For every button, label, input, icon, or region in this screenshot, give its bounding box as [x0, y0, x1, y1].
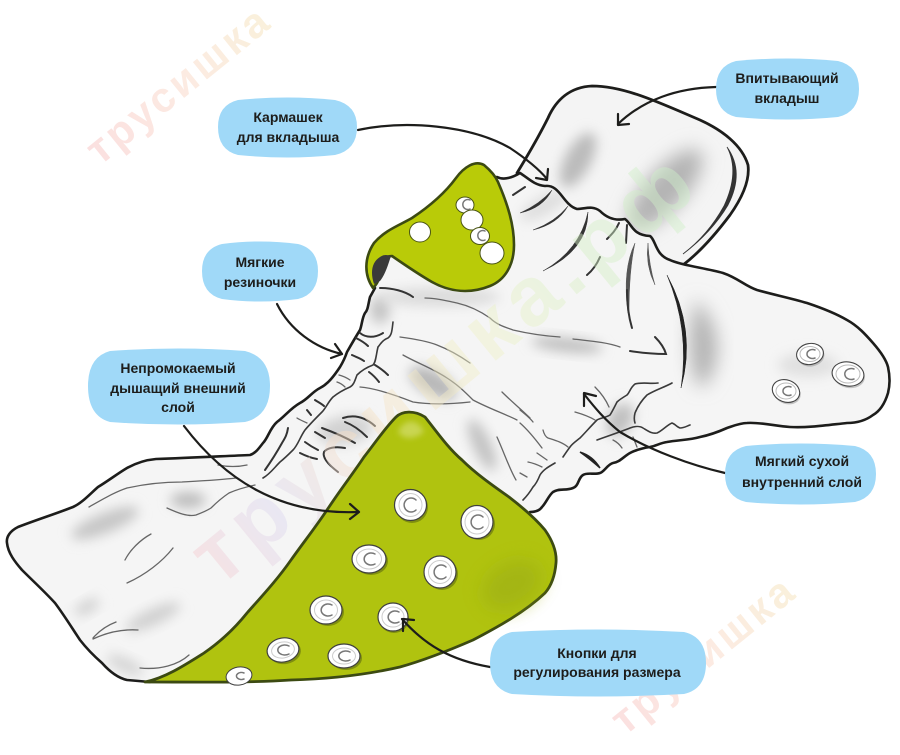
arrow: outer layer	[184, 426, 359, 519]
outline: body edge	[7, 173, 889, 682]
callout: insert: вкладыш	[755, 90, 819, 106]
callout: pocket: для вкладыша	[237, 129, 340, 145]
callout: pocket	[218, 98, 357, 158]
arrow: insert	[618, 87, 716, 125]
wrinkles: waist top	[513, 187, 687, 388]
callout: elastics	[202, 242, 318, 302]
callout: outer layer: слой	[161, 399, 195, 415]
callout: elastics: резиночки	[224, 274, 296, 290]
watermark: top left: трусишка	[76, 0, 280, 173]
wrinkles: lower right gather	[520, 383, 690, 500]
buttons on green layer	[225, 490, 495, 687]
callout: outer layer: дышащий внешний	[110, 380, 246, 396]
callout: snaps	[490, 630, 706, 696]
wrinkles: elastic left	[263, 288, 413, 478]
buttons on tab	[410, 197, 504, 264]
panel: diaper body inner layer	[7, 173, 889, 682]
arrow: snaps	[402, 619, 490, 667]
panel: green top tab	[366, 163, 514, 291]
callout: inner layer: Мягкий сухой	[755, 453, 849, 469]
callout: pocket: Кармашек	[253, 109, 324, 125]
panel: green outer layer	[145, 412, 556, 687]
callout: insert: Впитывающий	[735, 70, 839, 86]
arrow: elastics	[277, 304, 342, 358]
callout: snaps: регулирования размера	[513, 664, 681, 680]
callout: snaps: Кнопки для	[557, 645, 637, 661]
arrow: pocket	[358, 125, 548, 180]
callout: inner layer	[725, 444, 876, 504]
callout: outer layer	[88, 348, 270, 424]
watermark: bottom right: трусишка	[601, 565, 805, 743]
callout: insert	[716, 58, 859, 120]
callout: inner layer: внутренний слой	[742, 474, 862, 490]
callout: elastics: Мягкие	[235, 254, 285, 270]
wrinkles: left wing	[89, 465, 255, 668]
wrinkles: body centre	[360, 298, 620, 480]
arrow: inner layer	[584, 393, 725, 473]
callout: outer layer: Непромокаемый	[120, 360, 236, 376]
buttons on right wing	[769, 341, 867, 408]
tab opening	[372, 255, 391, 284]
watermark: center: трусишка.рф	[171, 130, 717, 602]
panel: absorbent insert	[517, 86, 748, 265]
